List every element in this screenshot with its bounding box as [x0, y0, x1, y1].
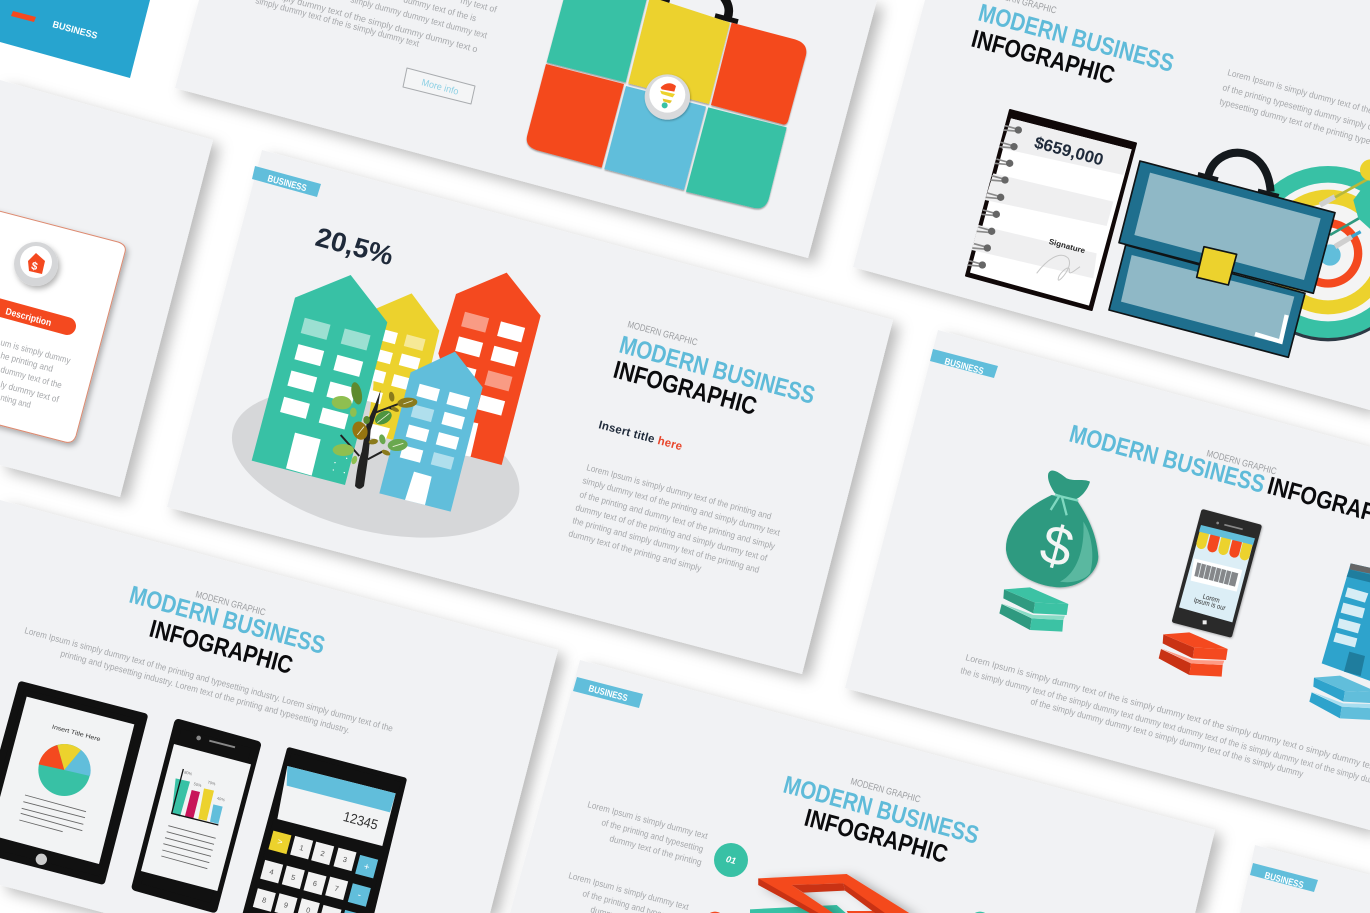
signature scribble [1037, 255, 1080, 280]
label: business: BUSINESS [51, 19, 99, 42]
button: more info [403, 68, 475, 104]
icon: office building [1322, 563, 1370, 683]
panel: right slide with money bag and phone [845, 330, 1370, 830]
icon: calculator: - [356, 890, 362, 901]
icon: phone with bar chart [136, 723, 257, 908]
panel: left slide with description card [0, 80, 213, 497]
icon: blue stack [1309, 676, 1370, 720]
card text: ly dummy text of [0, 379, 60, 405]
heading: infographic: INFOGRAPHIC [610, 356, 760, 421]
card: description [0, 206, 125, 442]
icon: calculator: 3 [342, 855, 348, 864]
card text: nting and [0, 392, 32, 410]
bar chart: 70% [207, 779, 217, 786]
icon: calculator: 5 [290, 873, 296, 882]
illustration: notebook, briefcase and target [966, 110, 1370, 357]
icon: calculator [240, 750, 404, 913]
building: blue [379, 352, 483, 512]
illustration: colour grid briefcase [527, 0, 806, 208]
ribbon: business: BUSINESS [1263, 870, 1305, 891]
panel: bottom-right small slide [1240, 845, 1370, 913]
body text: the printing and simply dummy text of the printing and [571, 515, 760, 575]
icon: calculator: 7 [333, 884, 340, 893]
icon: tree [331, 381, 418, 489]
subtitle: MODERN GRAPHIC [194, 589, 267, 619]
body text: Lorem Ipsum is simply dummy text of the printing and typesetting industry. Lorem simply dummy text of the [23, 625, 394, 734]
icon: money bag: $ [1034, 512, 1080, 580]
heading: modern business: MODERN BUSINESS [1066, 420, 1268, 499]
body text [567, 462, 782, 575]
body text: Lorem Ipsum is simply dummy text [586, 799, 709, 841]
building: green [252, 275, 387, 485]
icon: calculator: 4 [268, 867, 275, 877]
body text: simply dummy text of the printing and simply dummy text [581, 475, 782, 538]
panel: bottom-left slide with devices [0, 500, 558, 913]
illustration: isometric frames [705, 874, 990, 913]
icon: calculator: 9 [283, 900, 289, 910]
ribbon: business: BUSINESS [587, 683, 629, 704]
bar chart: 40% [216, 795, 226, 802]
body text [1218, 67, 1370, 147]
illustrations: money bag, phone, building [999, 471, 1370, 720]
subtitle: MODERN GRAPHIC [849, 776, 922, 806]
body text: dummy text of the printing and simply [567, 528, 703, 574]
button: more info: More info [420, 77, 460, 98]
panel: top-left blue slide [0, 0, 150, 78]
panel: bottom-center slide [510, 660, 1215, 913]
bar chart: 50% [193, 781, 203, 788]
card text: um is simply dummy [0, 337, 72, 366]
ribbon: business [573, 677, 643, 708]
panel: top-center slide with grid briefcase [175, 0, 877, 258]
icon: calculator: 8 [261, 895, 267, 905]
badge: 01: 01 [725, 854, 737, 866]
icon: calculator: + [362, 861, 371, 874]
heading: infographic: INFOGRAPHIC [968, 25, 1118, 90]
heading: modern business: MODERN BUSINESS [126, 581, 328, 660]
body text: of the simply dummy dummy text o simply dummy text of the is simply dummy [1029, 696, 1305, 779]
heading: infographic: INFOGRAPHIC [801, 804, 951, 869]
body text: of the printing and typesetting [600, 817, 704, 854]
stat: 20,5%: 20,5% [312, 222, 397, 271]
panel: top-right slide [853, 0, 1370, 410]
icon: phone: Lorem [1202, 594, 1221, 605]
subtitle: MODERN GRAPHIC [626, 319, 699, 349]
icon: notebook [966, 110, 1136, 310]
icon: calculator: 1 [298, 843, 305, 853]
icon: calculator: 2 [319, 849, 326, 858]
illustration: city buildings [217, 273, 541, 563]
badge: 01 [714, 843, 748, 877]
icon: house badge [14, 242, 58, 286]
icon: phone [1174, 512, 1259, 635]
card text [0, 337, 72, 410]
body text: Lorem Ipsum is simply dummy text of the printing and [585, 462, 773, 521]
bar chart [172, 769, 226, 825]
ribbon: business [252, 166, 321, 197]
button: lightbulb badge [645, 74, 690, 120]
bar chart: 80% [184, 769, 193, 776]
icon: calculator: 12345 [342, 808, 380, 833]
icon: calculator: 6 [312, 879, 318, 888]
body text: printing and typesetting industry. Lorem text of the printing and typesetting industry. [59, 648, 351, 735]
heading: modern business: MODERN BUSINESS [780, 771, 982, 850]
body text: of the printing and dummy text of the printing and simply [578, 489, 777, 551]
ribbon: business: BUSINESS [943, 356, 985, 377]
ribbon: business [930, 349, 998, 378]
icon: house badge: $ [30, 260, 39, 273]
icon: tablet with pie chart: Insert Title Here [51, 724, 102, 743]
illustration: devices [0, 685, 404, 913]
icon: target [1242, 159, 1370, 341]
panel: main slide with buildings [167, 150, 893, 674]
body text [567, 799, 709, 913]
icon: tablet with pie chart [0, 685, 144, 881]
pie chart [38, 744, 91, 796]
card text: dummy text of the [0, 364, 63, 390]
building: yellow [364, 293, 439, 442]
pill: description: Description [4, 306, 53, 329]
icon: red stack [1159, 632, 1228, 677]
subtitle: MODERN GRAPHIC [1205, 448, 1278, 478]
building: red [438, 273, 541, 465]
heading: modern business: MODERN BUSINESS [975, 0, 1177, 78]
ribbon: business: BUSINESS [266, 173, 308, 194]
icon: calculator: > [276, 836, 284, 847]
subheading: insert title here: Insert title here [597, 419, 683, 453]
icon: briefcase [1109, 153, 1335, 357]
body text: dummy text of of the printing and simply dummy text of [574, 502, 769, 563]
heading: modern business: MODERN BUSINESS [616, 331, 818, 410]
card text: he printing and [0, 350, 54, 374]
icon: money bag [1006, 471, 1098, 587]
icon: phone: Ipsum is our [1193, 597, 1227, 613]
heading: infographic: INFOGRAPHIC [146, 615, 296, 680]
body text: dummy text of the printing [608, 833, 703, 868]
icon: teal stack [999, 587, 1068, 632]
signature label: Signature [1048, 237, 1086, 255]
amount: $659,000 [1032, 133, 1105, 169]
